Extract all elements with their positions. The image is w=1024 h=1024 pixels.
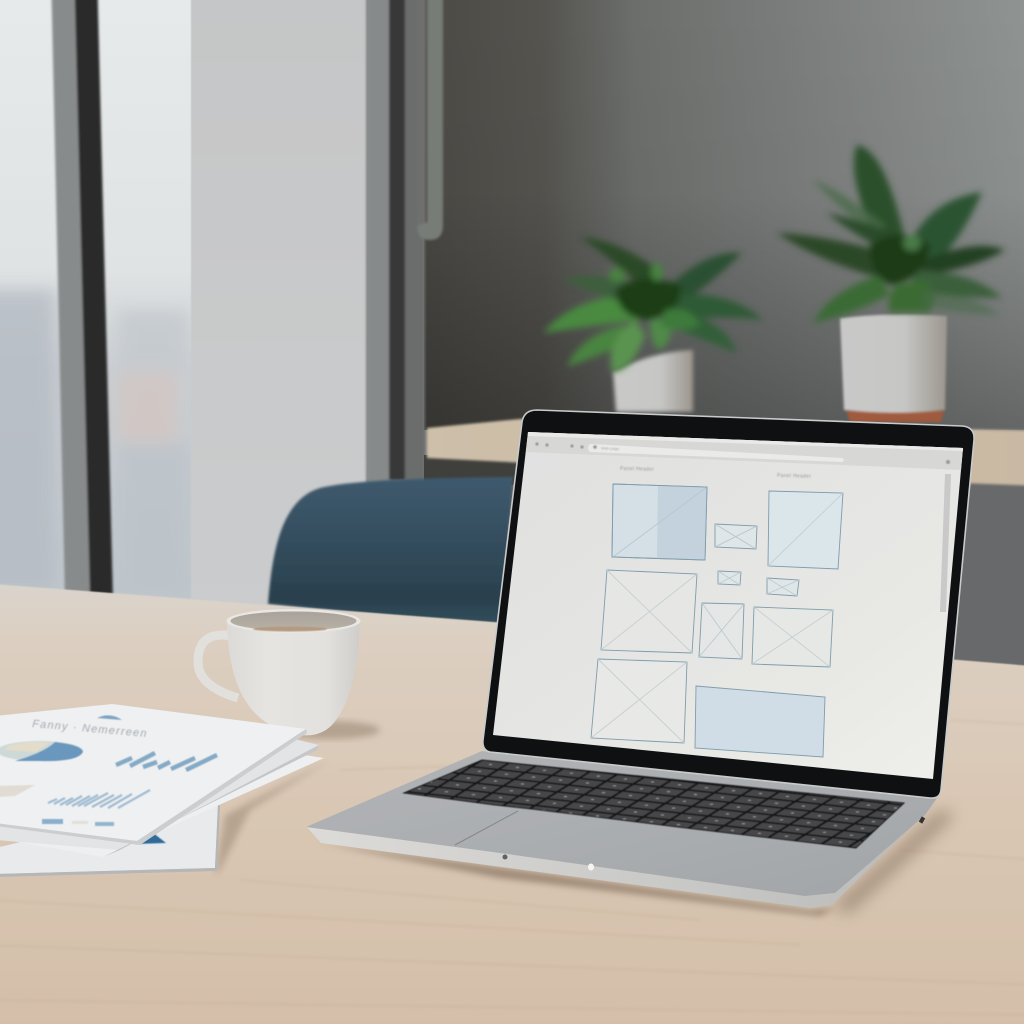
pie chart: [0, 741, 83, 761]
document stack: [0, 704, 324, 877]
hanging rod: [417, 0, 443, 240]
box 6: [767, 578, 799, 596]
screen: [493, 432, 963, 779]
box 9: [591, 659, 687, 743]
lower wall: [424, 470, 1024, 670]
shadow: laptop right: [832, 810, 955, 912]
top mark: [97, 715, 122, 720]
bottom sheet edge: [0, 804, 220, 877]
leaves: [543, 237, 763, 372]
coffee cup: [198, 609, 360, 735]
pot: [613, 350, 693, 412]
middle window: [96, 0, 196, 600]
wireframe label right: Panel Header: [777, 473, 811, 480]
shelf: [427, 419, 1024, 486]
sheet edge: [0, 729, 307, 845]
front notch: [502, 854, 508, 860]
sheet content: [0, 715, 217, 826]
bar chart: bottom: [48, 790, 150, 808]
box 5: [718, 571, 741, 585]
keyboard: [404, 760, 904, 848]
browser toolbar: [526, 432, 963, 470]
box 1: [612, 484, 707, 560]
curtain: [191, 0, 367, 610]
address text: Web page: [601, 446, 620, 451]
body: [227, 622, 360, 735]
cup interior: [230, 612, 356, 630]
saucer: [846, 410, 944, 422]
box 2: [715, 524, 757, 549]
toolbar buttons: [535, 442, 950, 464]
wireframe label left: Panel Header: [620, 466, 654, 473]
shadow: laptop front: [320, 843, 835, 916]
third sheet: [0, 752, 324, 857]
legend: [42, 819, 114, 826]
lower wall dark: [424, 455, 534, 485]
plant: right: [777, 145, 1005, 422]
box 10: [695, 686, 825, 757]
handle: [198, 635, 238, 698]
small chart left: [0, 785, 35, 797]
box 4: [601, 570, 697, 653]
chair: [268, 477, 513, 628]
base top: [306, 751, 937, 896]
top sheet: [0, 704, 306, 841]
wood grain: [0, 720, 1024, 1015]
table: [0, 583, 1024, 1024]
tab strip highlight: [528, 432, 963, 451]
hinge band: [482, 748, 940, 798]
second sheet edge: [103, 745, 319, 857]
plant: left: [543, 237, 763, 412]
base edge: [306, 802, 937, 908]
front light: [588, 864, 594, 870]
bar chart: top: [116, 753, 217, 770]
shadow: cup: [280, 721, 380, 739]
coffee: [253, 626, 327, 632]
laptop: [306, 410, 974, 908]
second sheet: [0, 738, 319, 850]
blue corner: [135, 832, 166, 844]
back wall: [424, 0, 1024, 430]
rim: [226, 609, 360, 633]
wireframe boxes: [591, 484, 843, 757]
trackpad line: [455, 811, 518, 845]
blurred city skyline: [0, 290, 190, 595]
wall column: [366, 0, 425, 490]
scrollbar: [940, 474, 951, 612]
window frame: [51, 0, 113, 600]
lid: [483, 410, 974, 798]
pot: [840, 314, 947, 413]
box 7: [699, 603, 744, 659]
address bar: [588, 444, 844, 462]
left window: [0, 0, 90, 590]
box 3: [768, 491, 843, 569]
title: Fanny · Nemerreen: [32, 718, 148, 740]
side port: [919, 816, 925, 824]
box 8: [752, 607, 833, 667]
shadow: documents: [215, 760, 330, 875]
leaves: [777, 145, 1005, 323]
bottom sheet: [0, 804, 218, 874]
back wall shade: [424, 0, 1024, 430]
